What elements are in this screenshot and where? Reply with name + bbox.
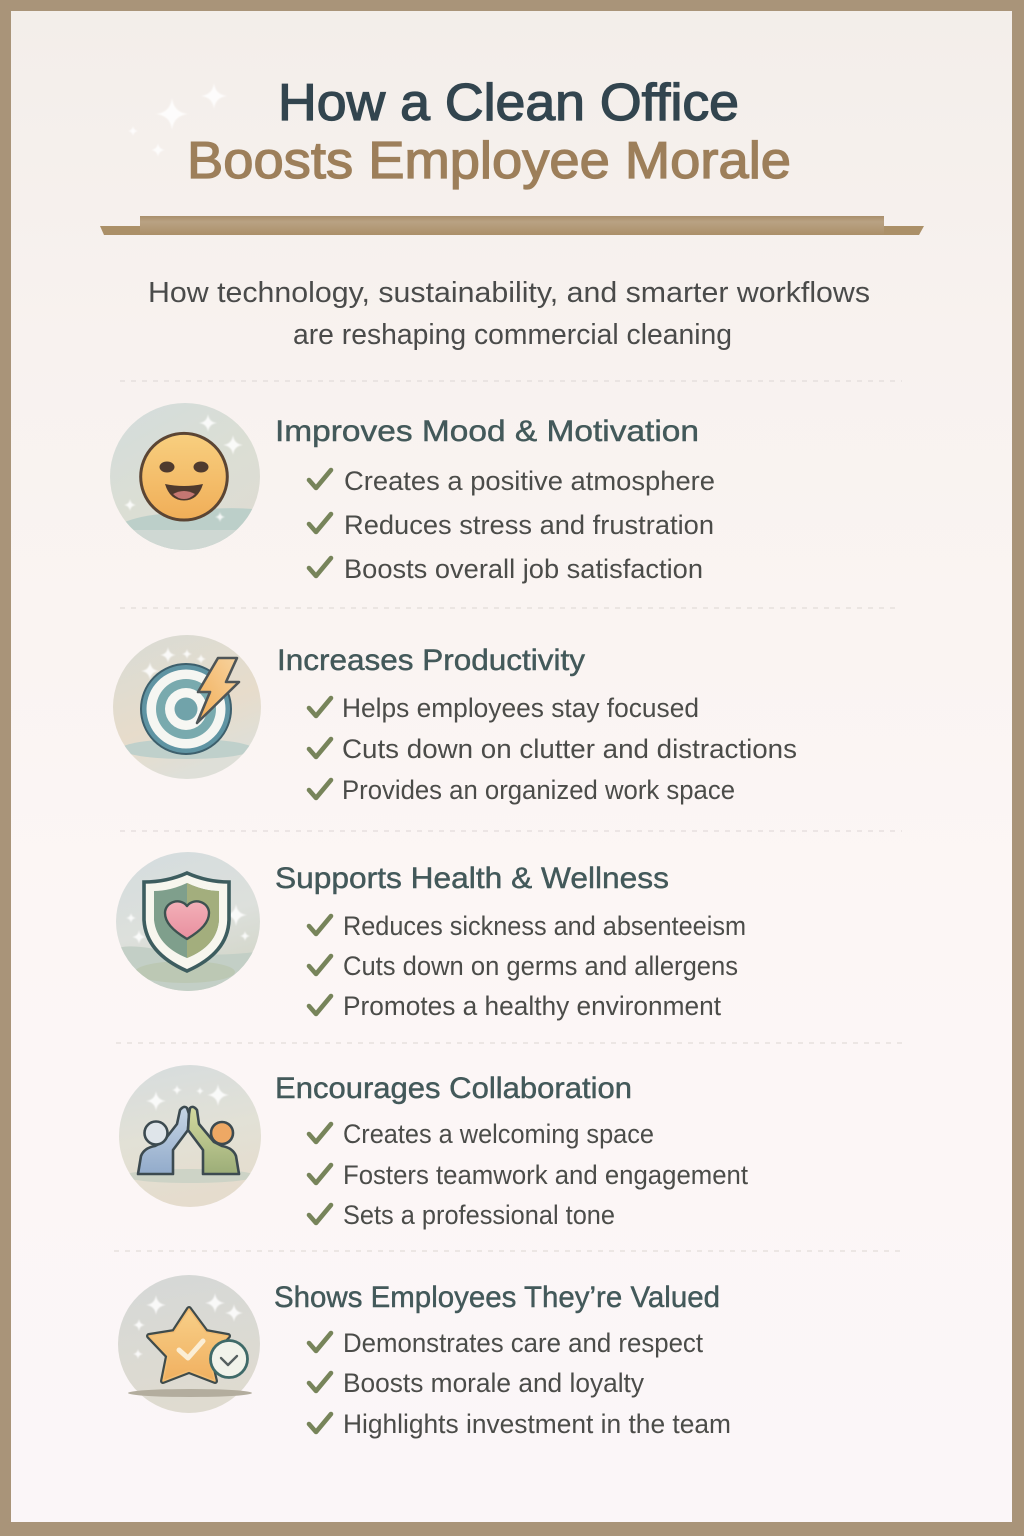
subtitle: How technology, sustainability, and smarter workflows (148, 277, 870, 309)
panel: encourages collaboration (119, 1065, 749, 1230)
heading: Encourages Collaboration (275, 1072, 632, 1105)
icon: target with lightning bolt (113, 635, 261, 779)
heading: Supports Health & Wellness (275, 862, 669, 895)
check item: Reduces sickness and absenteeism (343, 911, 746, 941)
panel: shows employees they're valued (118, 1275, 731, 1439)
panel: increases productivity (113, 635, 797, 805)
check item: Fosters teamwork and engagement (343, 1160, 749, 1190)
check item: Reduces stress and frustration (344, 510, 714, 540)
check item: Provides an organized work space (342, 775, 735, 805)
check item: Helps employees stay focused (342, 693, 699, 723)
check item: Cuts down on germs and allergens (343, 951, 738, 981)
title: Boosts Employee Morale (187, 132, 791, 190)
check item: Demonstrates care and respect (343, 1328, 704, 1358)
heading: Increases Productivity (277, 644, 585, 677)
title: How a Clean Office (278, 74, 739, 132)
panel: supports health and wellness (116, 852, 746, 1021)
check item: Creates a welcoming space (343, 1119, 654, 1149)
subtitle: are reshaping commercial cleaning (293, 319, 732, 351)
heading: Improves Mood & Motivation (275, 415, 699, 448)
title (187, 74, 791, 190)
panel: improves mood and motivation (108, 403, 715, 584)
check item: Cuts down on clutter and distractions (342, 734, 797, 764)
check item: Highlights investment in the team (343, 1409, 731, 1439)
icon: star with check badge (118, 1275, 260, 1413)
check item: Sets a professional tone (343, 1200, 615, 1230)
icon: two people high-fiving (119, 1065, 261, 1207)
check item: Promotes a healthy environment (343, 991, 722, 1021)
title rule (100, 216, 924, 235)
icon: smiling face (108, 403, 263, 552)
subtitle (148, 277, 870, 351)
title sparkles (128, 83, 227, 157)
check item: Boosts overall job satisfaction (344, 554, 703, 584)
icon: shield with heart (116, 852, 262, 995)
heading: Shows Employees They’re Valued (274, 1281, 720, 1314)
check item: Boosts morale and loyalty (343, 1368, 645, 1398)
check item: Creates a positive atmosphere (344, 466, 715, 496)
